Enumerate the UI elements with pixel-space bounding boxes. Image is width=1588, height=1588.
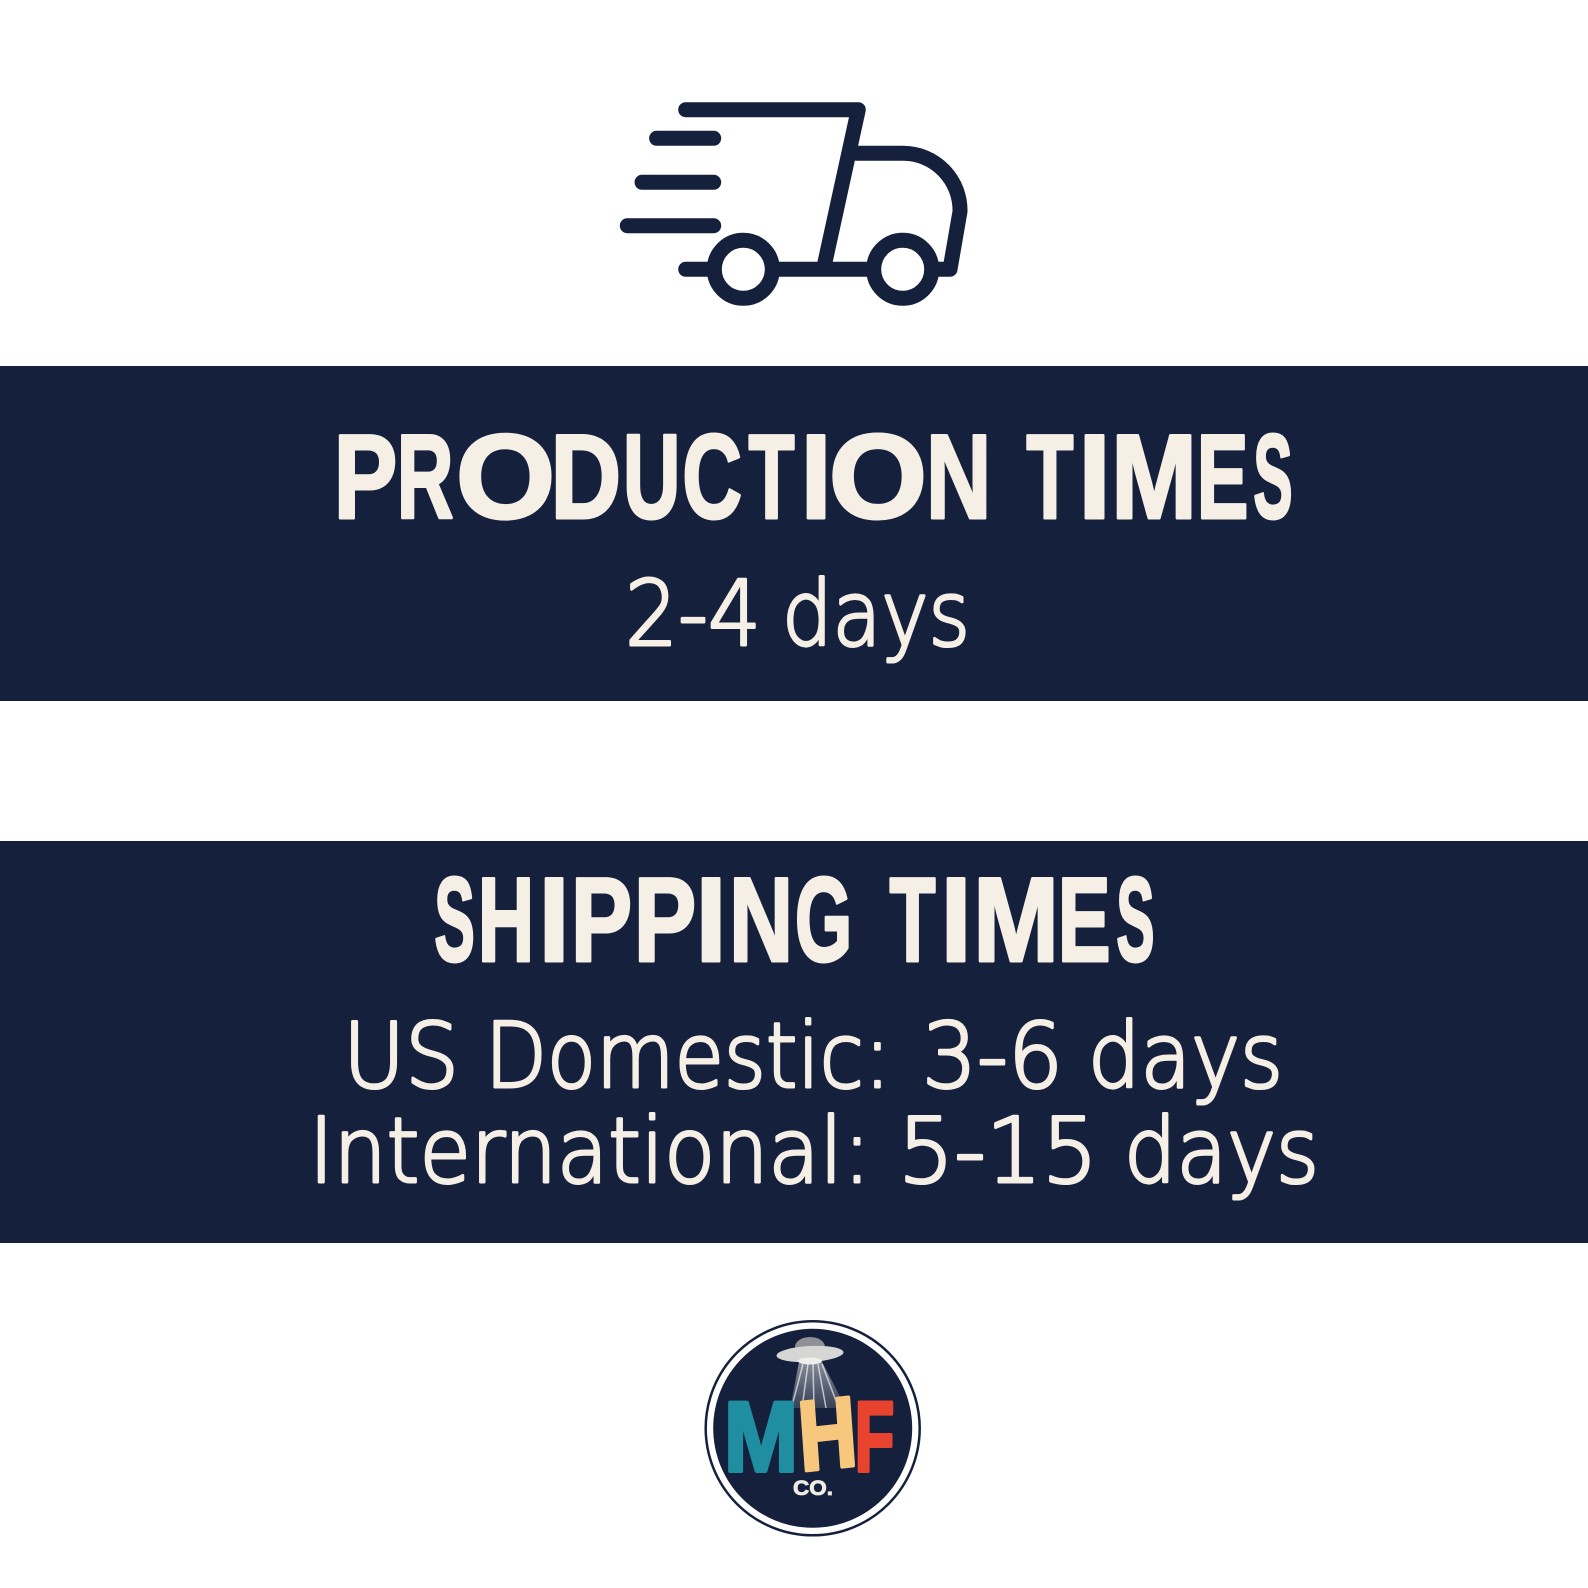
text: international shipping: International: [309, 1099, 871, 1204]
text: US domestic shipping: days [1088, 1004, 1283, 1109]
heading: shipping times: S [434, 853, 475, 987]
panel: shipping times: S [1116, 853, 1155, 987]
heading: production times: M [1111, 410, 1197, 544]
heading: production times: I [1078, 410, 1111, 544]
heading: shipping times: H [478, 853, 534, 987]
heading: production times: P [334, 410, 397, 544]
heading: shipping times: T [890, 853, 936, 987]
text: US domestic shipping: 3-6 [922, 1004, 1063, 1109]
heading: shipping times: M [973, 853, 1059, 987]
heading: production times: O [456, 410, 555, 544]
text: US domestic shipping: US [343, 1004, 459, 1109]
panel: production times [0, 366, 1588, 701]
heading: production times: N [926, 410, 991, 544]
text: production duration: days [782, 562, 970, 667]
heading: production times: T [1026, 410, 1074, 544]
heading: shipping times: E [1058, 853, 1111, 987]
logo text: CO.: CO. [793, 1477, 833, 1500]
heading: shipping times: I [539, 853, 570, 987]
text: US domestic shipping: Domestic: [485, 1004, 891, 1109]
heading: shipping times: P [571, 853, 632, 987]
icon: UFO with beam [776, 1337, 846, 1408]
logo letters: MHF: M [724, 1381, 798, 1492]
heading: production times: C [682, 410, 742, 544]
text: international shipping: days [1124, 1099, 1319, 1204]
heading: production times: O [829, 410, 927, 544]
text: international shipping: 5-15 [898, 1099, 1098, 1204]
heading: production times: T [748, 410, 795, 544]
heading: production times: I [801, 410, 832, 544]
panel: shipping times [0, 841, 1588, 1243]
heading: shipping times: G [795, 853, 852, 987]
logo letters: MHF: F [855, 1381, 894, 1492]
heading: production times: E [1197, 410, 1248, 544]
heading: production times: U [623, 410, 680, 544]
text: production duration: 2-4 [625, 562, 761, 667]
heading: shipping times: I [696, 853, 726, 987]
panel: production times: S [1253, 410, 1293, 544]
logo: MHF Co. badge [706, 1321, 920, 1535]
icon: delivery truck [627, 110, 960, 298]
heading: production times: D [550, 410, 621, 544]
heading: production times: R [397, 410, 454, 544]
heading: shipping times: N [729, 853, 793, 987]
logo letters: MHF: H [793, 1376, 861, 1492]
heading: shipping times: I [941, 853, 972, 987]
heading: shipping times: P [634, 853, 696, 987]
